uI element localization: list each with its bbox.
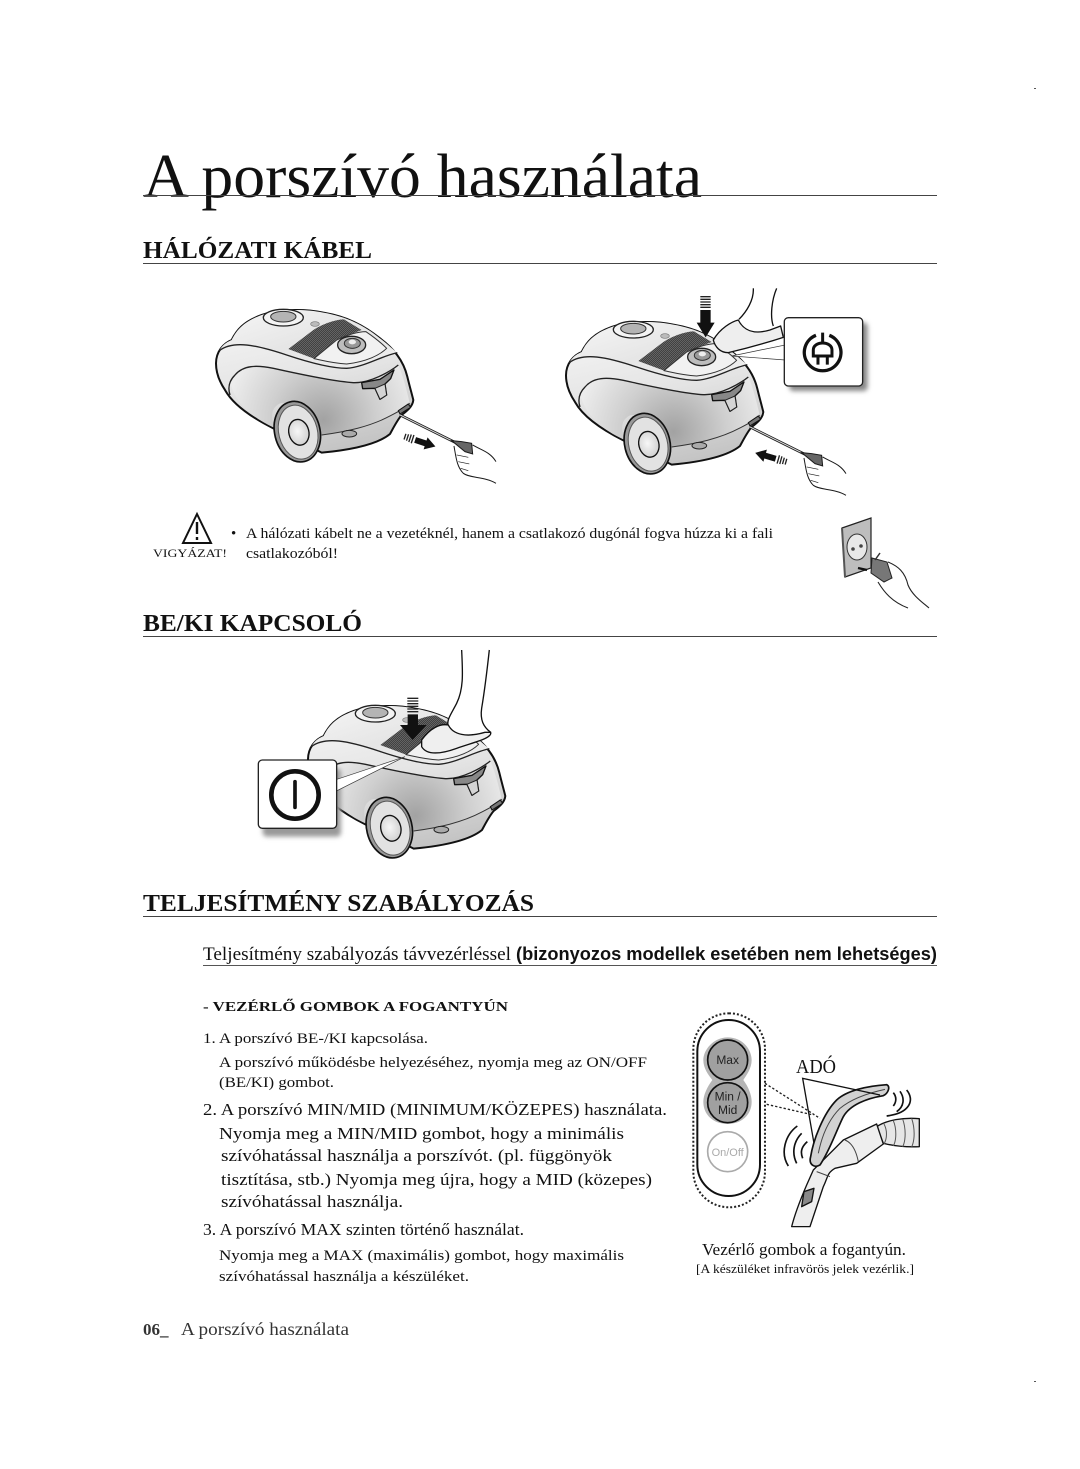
subheading: remote power control: (bizonyozos modellek esetében nem lehetséges) [516, 943, 937, 964]
arrow: pull direction [403, 431, 437, 453]
crop mark bottom [1034, 1381, 1036, 1382]
instruction 2: 2. A porszívó MIN/MID (MINIMUM/KÖZEPES) használata. [203, 1100, 667, 1119]
arrow: press down [400, 698, 427, 740]
callout shadow [263, 768, 341, 837]
vacuum body [216, 309, 413, 467]
zoom dashed lines [765, 1083, 820, 1118]
warning text: A hálózati kábelt ne a vezetéknél, hanem a csatlakozó dugónál fogva húzza ki a fali [246, 526, 773, 542]
instruction 3 [203, 1220, 624, 1285]
heading rule [143, 916, 937, 917]
heading rule [143, 636, 937, 637]
button panel: Min / [715, 1090, 741, 1104]
section label: handle controls: - VEZÉRLŐ GOMBOK A FOGANTYÚN [203, 998, 508, 1015]
callout wedge [732, 345, 785, 360]
instruction 1: A porszívó működésbe helyezéséhez, nyomja meg az ON/OFF [219, 1055, 647, 1071]
handle detail [818, 1089, 885, 1153]
page footer: A porszívó használata [181, 1319, 349, 1339]
instruction 2: szívóhatással használja a porszívót. (pl. függönyök [221, 1146, 613, 1165]
heading: teljesítmény szabályozás: TELJESÍTMÉNY SZABÁLYOZÁS [143, 889, 534, 917]
vacuum body [566, 321, 763, 479]
instruction 3: Nyomja meg a MAX (maximális) gombot, hogy maximális [219, 1248, 624, 1264]
illustration: foot pressing on/off pedal [258, 650, 505, 863]
instruction 2 [203, 1100, 667, 1211]
warning text [231, 526, 773, 562]
hose and wand [792, 1118, 919, 1227]
instruction 2: Nyomja meg a MIN/MID gombot, hogy a minimális [219, 1124, 624, 1143]
warning text: • [231, 526, 236, 542]
title: A porszívó használata [143, 143, 702, 211]
callout shadow [789, 323, 868, 391]
callout wedge [335, 757, 405, 792]
signal waves right [887, 1090, 910, 1116]
arrow: press down [697, 297, 715, 337]
crop mark top [1034, 88, 1036, 89]
arrow: rewind direction [753, 447, 788, 468]
subheading: remote power control: Teljesítmény szabályozás távvezérléssel [203, 944, 511, 965]
callout box with power icon [258, 760, 337, 828]
callout box with plug icon [784, 318, 863, 386]
warning icon and label: VIGYÁZAT! [153, 546, 227, 560]
caption: infrared note: [A készüléket infravörös jelek vezérlik.] [696, 1261, 914, 1276]
caption: handle buttons: Vezérlő gombok a fogantyún. [702, 1240, 906, 1259]
illustration: vacuum with cord pulled out [216, 309, 496, 483]
button panel: Max [716, 1053, 739, 1067]
vacuum body [308, 705, 505, 863]
subheading rule [203, 965, 937, 966]
heading: be/ki kapcsoló: BE/KI KAPCSOLÓ [143, 609, 362, 637]
foot on pedal [713, 288, 783, 353]
hand holding cord [750, 427, 846, 495]
handle grip [810, 1085, 889, 1166]
instruction 3: szívóhatással használja a készüléket. [219, 1269, 469, 1285]
title rule [143, 195, 937, 196]
heading rule [143, 263, 937, 264]
illustration: vacuum with cord rewind pedal [566, 288, 868, 495]
hand pulling cord [400, 415, 496, 483]
instruction 2: tisztítása, stb.) Nyomja meg újra, hogy a MID (közepes) [221, 1170, 652, 1189]
instruction 1 [203, 1031, 647, 1091]
illustration: handle controls [693, 1013, 919, 1227]
heading: hálózati kábel: HÁLÓZATI KÁBEL [143, 236, 372, 264]
transmitter pointer lines [803, 1078, 880, 1143]
instruction 1: 1. A porszívó BE-/KI kapcsolása. [203, 1031, 428, 1047]
button panel [693, 1013, 765, 1207]
warning text: csatlakozóból! [246, 546, 338, 562]
warning icon and label [153, 514, 227, 560]
signal waves left [784, 1126, 807, 1166]
subheading: remote power control [203, 943, 937, 965]
button panel: Mid [718, 1103, 737, 1117]
page footer: 06_ [143, 1320, 169, 1339]
button panel: On/Off [712, 1147, 745, 1159]
label: transmitter: ADÓ [796, 1054, 836, 1078]
instruction 2: szívóhatással használja. [221, 1192, 403, 1211]
illustration: wall socket and hand [842, 518, 929, 608]
instruction 3: 3. A porszívó MAX szinten történő használat. [203, 1220, 524, 1239]
foot on pedal [422, 650, 491, 753]
instruction 1: (BE/KI) gombot. [219, 1075, 334, 1091]
